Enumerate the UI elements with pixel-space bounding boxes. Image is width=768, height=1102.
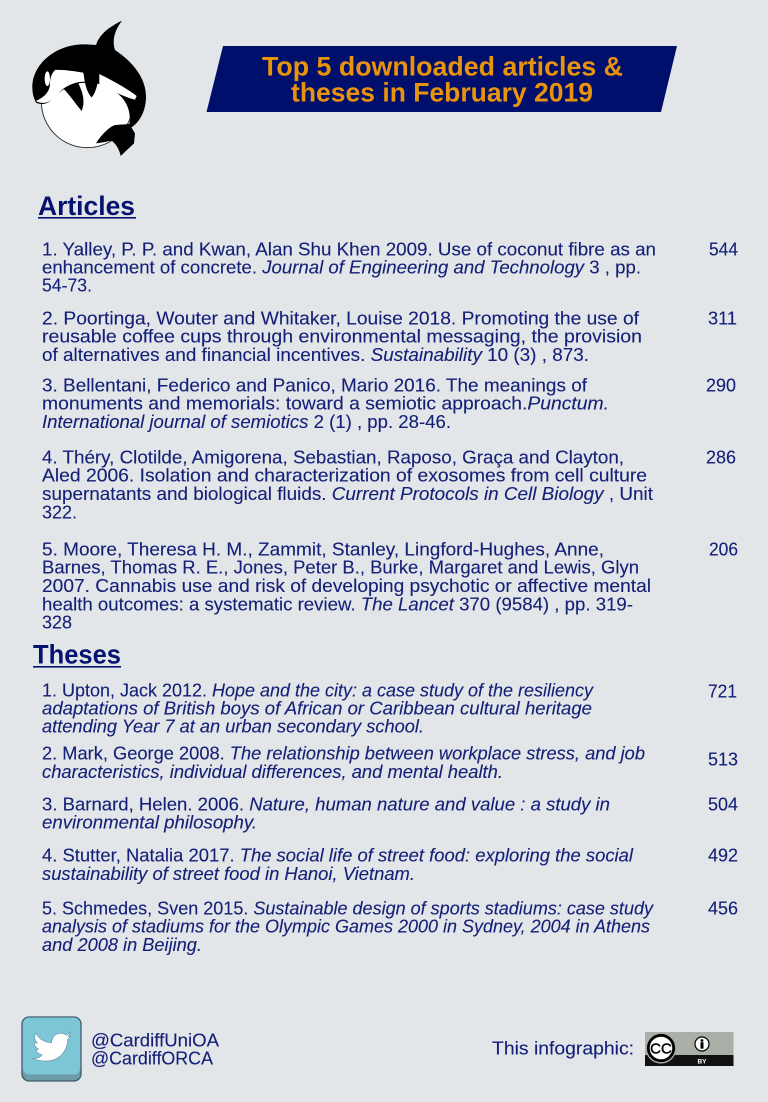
thesis 3: 3. Barnard, Helen. 2006. Nature, human nature and value : a study in — [42, 793, 610, 814]
thesis 1 — [42, 679, 595, 736]
thesis 1: adaptations of British boys of African or Caribbean cultural heritage — [42, 697, 592, 718]
article 1: 1. Yalley, P. P. and Kwan, Alan Shu Khen 2009. Use of coconut fibre as an — [42, 238, 656, 259]
title banner: Top 5 downloaded articles & — [262, 52, 623, 82]
article 3: monuments and memorials: toward a semiotic approach. Punctum. — [42, 392, 609, 413]
article 4 downloads: 286 — [706, 446, 736, 467]
thesis 5 downloads: 456 — [708, 897, 738, 918]
article 5 downloads: 206 — [709, 538, 738, 559]
article 5: 328 — [42, 611, 72, 632]
thesis 1: attending Year 7 at an urban secondary school. — [42, 715, 424, 736]
article 2 downloads: 311 — [708, 307, 737, 328]
thesis 1: 1. Upton, Jack 2012. Hope and the city: a case study of the resiliency — [42, 679, 595, 700]
icon: orca logo — [32, 21, 146, 156]
article 2 — [42, 307, 642, 365]
twitter handles: @CardiffORCA — [91, 1047, 214, 1068]
twitter handles: @CardiffUniOA — [91, 1029, 220, 1050]
thesis 5 — [42, 897, 655, 955]
icon: creative commons BY badge: BY — [697, 1058, 707, 1066]
thesis 5: analysis of stadiums for the Olympic Games 2000 in Sydney, 2004 in Athens — [42, 915, 650, 936]
article 4: supernatants and biological fluids. Current Protocols in Cell Biology , Unit — [42, 483, 654, 504]
article 1: enhancement of concrete. Journal of Engineering and Technology 3 , pp. — [42, 256, 641, 277]
thesis 3 downloads: 504 — [708, 793, 738, 814]
article 3: International journal of semiotics 2 (1) , pp. 28-46. — [42, 411, 451, 432]
licence label: This infographic: — [492, 1037, 634, 1058]
thesis 2: 2. Mark, George 2008. The relationship between workplace stress, and job — [42, 742, 645, 763]
thesis 4: 4. Stutter, Natalia 2017. The social life of street food: exploring the social — [42, 844, 634, 865]
thesis 4 — [42, 844, 634, 884]
icon: creative commons BY badge: CC — [650, 1040, 672, 1058]
article 4 — [42, 446, 654, 522]
icon: twitter badge — [22, 1017, 81, 1081]
article 3 downloads: 290 — [706, 374, 736, 395]
thesis 3 — [42, 793, 610, 832]
thesis 2 — [42, 742, 645, 782]
heading: Articles: Articles — [38, 191, 135, 221]
article 2: reusable coffee cups through environmental messaging, the provision — [42, 325, 642, 346]
article 2: of alternatives and financial incentives. Sustainability 10 (3) , 873. — [42, 344, 589, 365]
article 4: 4. Théry, Clotilde, Amigorena, Sebastian, Raposo, Graça and Clayton, — [42, 446, 624, 467]
thesis 2: characteristics, individual differences, and mental health. — [42, 761, 503, 782]
thesis 5: 5. Schmedes, Sven 2015. Sustainable design of sports stadiums: case study — [42, 897, 655, 918]
article 5: 5. Moore, Theresa H. M., Zammit, Stanley, Lingford-Hughes, Anne, — [42, 538, 604, 559]
article 4: 322. — [42, 501, 77, 522]
thesis 5: and 2008 in Beijing. — [42, 934, 202, 955]
thesis 4: sustainability of street food in Hanoi, Vietnam. — [42, 863, 415, 884]
article 3: 3. Bellentani, Federico and Panico, Mario 2016. The meanings of — [42, 374, 588, 395]
article 1: 54-73. — [42, 274, 92, 295]
thesis 3: environmental philosophy. — [42, 811, 257, 832]
thesis 1 downloads: 721 — [708, 680, 737, 701]
icon: creative commons BY badge — [645, 1032, 734, 1066]
article 1 — [42, 238, 656, 295]
article 5 — [42, 538, 651, 632]
thesis 4 downloads: 492 — [708, 844, 738, 865]
article 4: Aled 2006. Isolation and characterization of exosomes from cell culture — [42, 464, 647, 485]
article 3 — [42, 374, 609, 432]
article 1 downloads: 544 — [709, 238, 738, 259]
heading: Theses: Theses — [33, 640, 121, 670]
article 5: 2007. Cannabis use and risk of developing psychotic or affective mental — [42, 575, 651, 596]
twitter handles — [91, 1029, 220, 1068]
thesis 2 downloads: 513 — [708, 748, 738, 769]
article 2: 2. Poortinga, Wouter and Whitaker, Louise 2018. Promoting the use of — [42, 307, 640, 328]
title banner — [206, 46, 677, 112]
article 5: health outcomes: a systematic review. The Lancet 370 (9584) , pp. 319- — [42, 593, 633, 614]
title banner: theses in February 2019 — [291, 78, 593, 108]
article 5: Barnes, Thomas R. E., Jones, Peter B., Burke, Margaret and Lewis, Glyn — [42, 556, 639, 577]
